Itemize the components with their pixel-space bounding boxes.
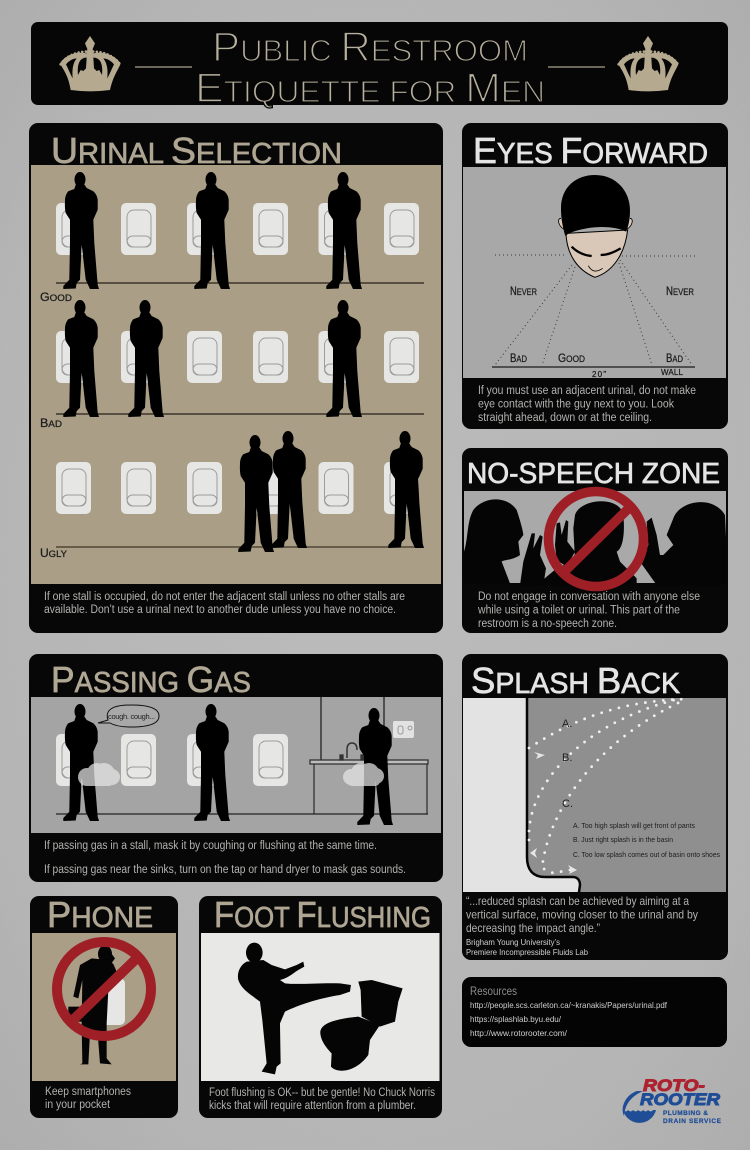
heading: urinal selection: URINAL SELECTION xyxy=(51,130,342,171)
links xyxy=(470,1000,668,1038)
labels: splash points: B. xyxy=(562,752,572,764)
row: ugly xyxy=(40,431,424,560)
caption: passing gas: If passing gas in a stall, mask it by coughing or flushing at the same time. xyxy=(44,840,377,852)
caption: urinal selection: available. Don’t use a urinal next to another dude unless you have no choice. xyxy=(44,604,396,616)
caption: no-speech zone: restroom is a no-speech zone. xyxy=(478,618,617,630)
panel: resources xyxy=(462,977,727,1047)
gas cloud right xyxy=(343,763,384,786)
quote: “...reduced splash can be achieved by aiming at a xyxy=(466,894,689,908)
quote: Premiere Incompressible Fluids Lab xyxy=(466,947,588,957)
gas cloud left xyxy=(78,763,120,786)
header banner xyxy=(31,22,728,111)
icon: left crown xyxy=(60,36,121,91)
caption: eyes forward: If you must use an adjacent urinal, do not make xyxy=(478,385,696,397)
row: bad: BAD xyxy=(40,416,62,430)
illustration: kicking man and toilet xyxy=(238,943,403,1074)
labels: splash points: A. xyxy=(562,718,572,730)
row: ugly: UGLY xyxy=(40,546,68,560)
logo: roto-rooter xyxy=(623,1076,722,1125)
splash trajectories xyxy=(529,699,690,873)
logo: roto-rooter: ROOTER xyxy=(640,1090,721,1109)
caption: urinal selection xyxy=(44,591,405,616)
caption: passing gas: If passing gas near the sinks, turn on the tap or hand dryer to mask gas sounds. xyxy=(44,864,406,876)
labels: sight zones xyxy=(510,284,694,379)
caption: foot flushing: Foot flushing is OK-- but be gentle! No Chuck Norris xyxy=(209,1087,435,1099)
quote xyxy=(466,894,698,957)
labels: sight zones: WALL xyxy=(661,368,684,377)
urinals xyxy=(56,734,288,786)
title: ETIQUETTE FOR MEN xyxy=(195,64,545,111)
panel: no-speech zone xyxy=(462,448,728,633)
icon: right crown xyxy=(618,36,679,91)
caption: eyes forward: eye contact with the guy next to you. Look xyxy=(478,398,674,410)
title xyxy=(195,23,545,111)
links: https://splashlab.byu.edu/ xyxy=(470,1014,562,1024)
speech bubble: cough. cough... xyxy=(108,712,155,721)
row: good: GOOD xyxy=(40,290,72,304)
labels: sight zones: BAD xyxy=(666,351,683,365)
caption: no-speech zone: while using a toilet or urinal. This part of the xyxy=(477,604,680,616)
labels: splash points xyxy=(562,718,573,810)
caption: foot flushing xyxy=(209,1087,435,1112)
quote: decreasing the impact angle.” xyxy=(466,921,600,935)
hand dryer xyxy=(393,721,414,738)
labels: sight zones: 20” xyxy=(592,370,606,379)
heading: splash back: SPLASH BACK xyxy=(471,660,680,701)
heading: foot flushing: FOOT FLUSHING xyxy=(214,894,431,935)
panel: foot flushing xyxy=(199,894,442,1118)
logo: roto-rooter: PLUMBING & xyxy=(663,1110,708,1117)
panel: urinal selection xyxy=(29,123,443,633)
panel: eyes forward xyxy=(462,123,728,429)
arrowheads xyxy=(530,752,577,874)
legend: C. Too low splash comes out of basin onto shoes xyxy=(573,850,720,859)
sight-line diagram xyxy=(495,255,695,365)
row: good xyxy=(40,172,424,304)
labels: sight zones: BAD xyxy=(510,351,527,365)
heading: resources: Resources xyxy=(470,984,517,998)
title: PUBLIC RESTROOM xyxy=(212,23,528,70)
caption: no-speech zone xyxy=(477,591,700,630)
legend: A. Too high splash will get front of pants xyxy=(573,821,695,830)
kicking man xyxy=(238,943,351,1074)
labels: sight zones: NEVER xyxy=(510,284,537,298)
legend: B. Just right splash is in the basin xyxy=(573,835,673,844)
panel: phone xyxy=(30,894,178,1118)
links: http://www.rotorooter.com/ xyxy=(470,1028,568,1038)
speech bubble xyxy=(98,705,159,727)
urinal cross-section xyxy=(463,698,580,892)
row: bad xyxy=(40,300,424,430)
heading: phone: PHONE xyxy=(47,894,153,935)
caption: urinal selection: If one stall is occupied, do not enter the adjacent stall unless no other stalls are xyxy=(44,591,405,603)
icon: head looking down xyxy=(559,175,632,277)
heading: eyes forward: EYES FORWARD xyxy=(473,130,708,171)
toilet xyxy=(320,980,403,1071)
caption: passing gas xyxy=(44,840,406,876)
caption: eyes forward: straight ahead, down or at the ceiling. xyxy=(478,412,652,424)
quote: vertical surface, moving closer to the urinal and by xyxy=(466,908,698,922)
logo: roto-rooter: ROTO- xyxy=(643,1076,705,1095)
legend xyxy=(573,821,720,859)
caption: foot flushing: kicks that will require attention from a plumber. xyxy=(209,1100,416,1112)
heading: no-speech zone: NO-SPEECH ZONE xyxy=(467,458,720,490)
urinal wall line xyxy=(527,698,580,892)
men xyxy=(63,704,393,825)
caption: eyes forward xyxy=(478,385,696,424)
caption: phone: in your pocket xyxy=(45,1099,111,1111)
illustration: man on phone at urinal xyxy=(68,945,125,1064)
logo: roto-rooter: DRAIN SERVICE xyxy=(663,1118,722,1125)
heading: passing gas: PASSING GAS xyxy=(51,659,251,700)
caption: phone xyxy=(45,1086,131,1111)
links: http://people.scs.carleton.ca/~kranakis/Papers/urinal.pdf xyxy=(470,1000,668,1010)
icon: prohibition sign xyxy=(548,492,644,586)
labels: sight zones: GOOD xyxy=(558,351,585,365)
labels: sight zones: NEVER xyxy=(666,284,694,298)
caption: phone: Keep smartphones xyxy=(45,1086,131,1098)
panel: passing gas xyxy=(29,654,443,882)
illustration: talking silhouettes xyxy=(464,499,727,585)
sink area xyxy=(310,697,428,814)
panel: splash back xyxy=(462,654,728,960)
icon: prohibition sign xyxy=(57,942,151,1036)
labels: splash points: C. xyxy=(562,798,573,810)
caption: no-speech zone: Do not engage in conversation with anyone else xyxy=(478,591,700,603)
quote: Brigham Young University’s xyxy=(466,937,560,947)
